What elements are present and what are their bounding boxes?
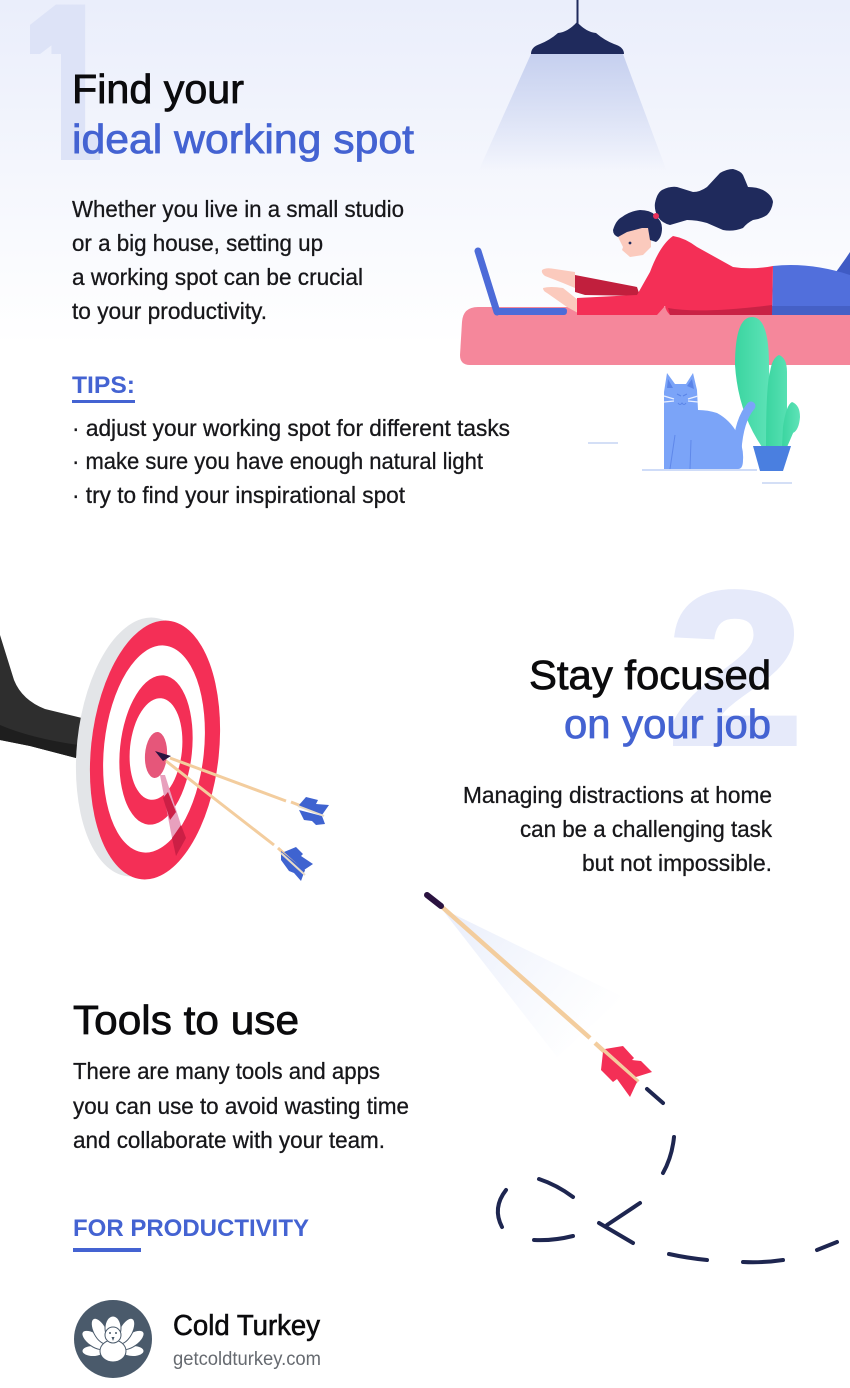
text: managing distractions: but not impossible. <box>582 850 772 876</box>
woman: eye <box>629 242 631 244</box>
target: arrow shadow <box>160 775 181 838</box>
illustration: laptop <box>478 251 567 315</box>
illustration: arrows in target <box>155 751 329 881</box>
text: managing distractions: can be a challenging task <box>520 816 772 842</box>
intro text: a working spot can be crucial <box>72 264 363 290</box>
arrow one <box>170 758 329 825</box>
text: tools description: you can use to avoid wasting time <box>73 1093 409 1119</box>
large number 2: 2 <box>668 547 803 789</box>
text: tools description <box>73 1058 409 1153</box>
woman: hair <box>613 210 662 242</box>
woman: far arm <box>575 275 640 296</box>
text: managing distractions <box>463 782 772 876</box>
target: white ring <box>93 640 215 858</box>
heading: stay focused on your job <box>529 652 771 747</box>
intro text: or a big house, setting up <box>72 230 323 256</box>
illustration: dashed flight path <box>498 1089 837 1262</box>
cat: whiskers <box>664 396 698 402</box>
illustration: woman lying down <box>542 169 850 315</box>
target: bullseye <box>143 731 169 779</box>
illustration: target <box>64 611 232 886</box>
illustration: ceiling lamp <box>478 0 667 172</box>
woman: hands <box>542 268 578 313</box>
heading: tools to use: Tools to use <box>73 997 299 1043</box>
target: inner ring <box>112 672 200 828</box>
tips list: · try to find your inspirational spot <box>72 482 405 508</box>
text: tools description: There are many tools and apps <box>73 1058 380 1084</box>
woman: legs <box>772 252 850 315</box>
illustration: bed <box>460 307 850 365</box>
arrow trail <box>441 908 623 1057</box>
heading: stay focused on your job: on your job <box>564 701 771 747</box>
illustration: flying arrow <box>427 895 652 1097</box>
arrow head <box>155 751 171 761</box>
tool url: getcoldturkey.com <box>173 1349 321 1370</box>
plant: leaves <box>735 317 800 447</box>
intro text: Whether you live in a small studio <box>72 196 404 222</box>
cat: tail <box>737 406 751 450</box>
arrow tip <box>427 895 441 906</box>
woman: ponytail <box>655 169 773 231</box>
illustration: cat <box>642 373 757 471</box>
target: inner white <box>125 696 187 802</box>
arrow shaft <box>441 906 638 1082</box>
tips list: · make sure you have enough natural light <box>72 448 483 474</box>
panel background <box>0 0 850 345</box>
tips list <box>72 415 510 508</box>
floor dashes <box>588 442 792 484</box>
illustration: target arm <box>0 635 82 758</box>
woman: hair tie <box>653 213 659 219</box>
text: tools description: and collaborate with your team. <box>73 1127 385 1153</box>
icon: cold turkey logo <box>74 1300 152 1378</box>
subheading: for productivity: FOR PRODUCTIVITY <box>73 1215 309 1242</box>
tips heading: TIPS: <box>72 372 135 399</box>
tips list: · adjust your working spot for different tasks <box>72 415 510 441</box>
woman: face <box>618 226 651 257</box>
cat: legs <box>670 435 691 469</box>
cat: inner ears <box>667 379 694 389</box>
target: side <box>64 611 218 883</box>
heading: find your ideal working spot: ideal working spot <box>72 116 415 162</box>
heading: find your ideal working spot <box>72 66 415 162</box>
woman: torso shadow <box>668 305 772 315</box>
heading: find your ideal working spot: Find your <box>72 66 244 112</box>
target: outer ring <box>78 614 232 886</box>
arrow feathers <box>601 1046 652 1097</box>
intro text <box>72 196 404 324</box>
tool name: cold turkey: Cold Turkey <box>173 1310 320 1342</box>
text: managing distractions: Managing distractions at home <box>463 782 772 808</box>
intro text: to your productivity. <box>72 298 267 324</box>
illustration: potted plant <box>735 317 800 471</box>
cat: body <box>664 373 743 469</box>
cat: face <box>677 394 687 404</box>
floor line <box>642 469 757 471</box>
woman: torso <box>577 236 773 315</box>
arrow two <box>166 761 313 881</box>
target: shadow on rings <box>163 792 186 856</box>
plant: pot <box>753 446 791 471</box>
heading: stay focused on your job: Stay focused <box>529 652 771 698</box>
